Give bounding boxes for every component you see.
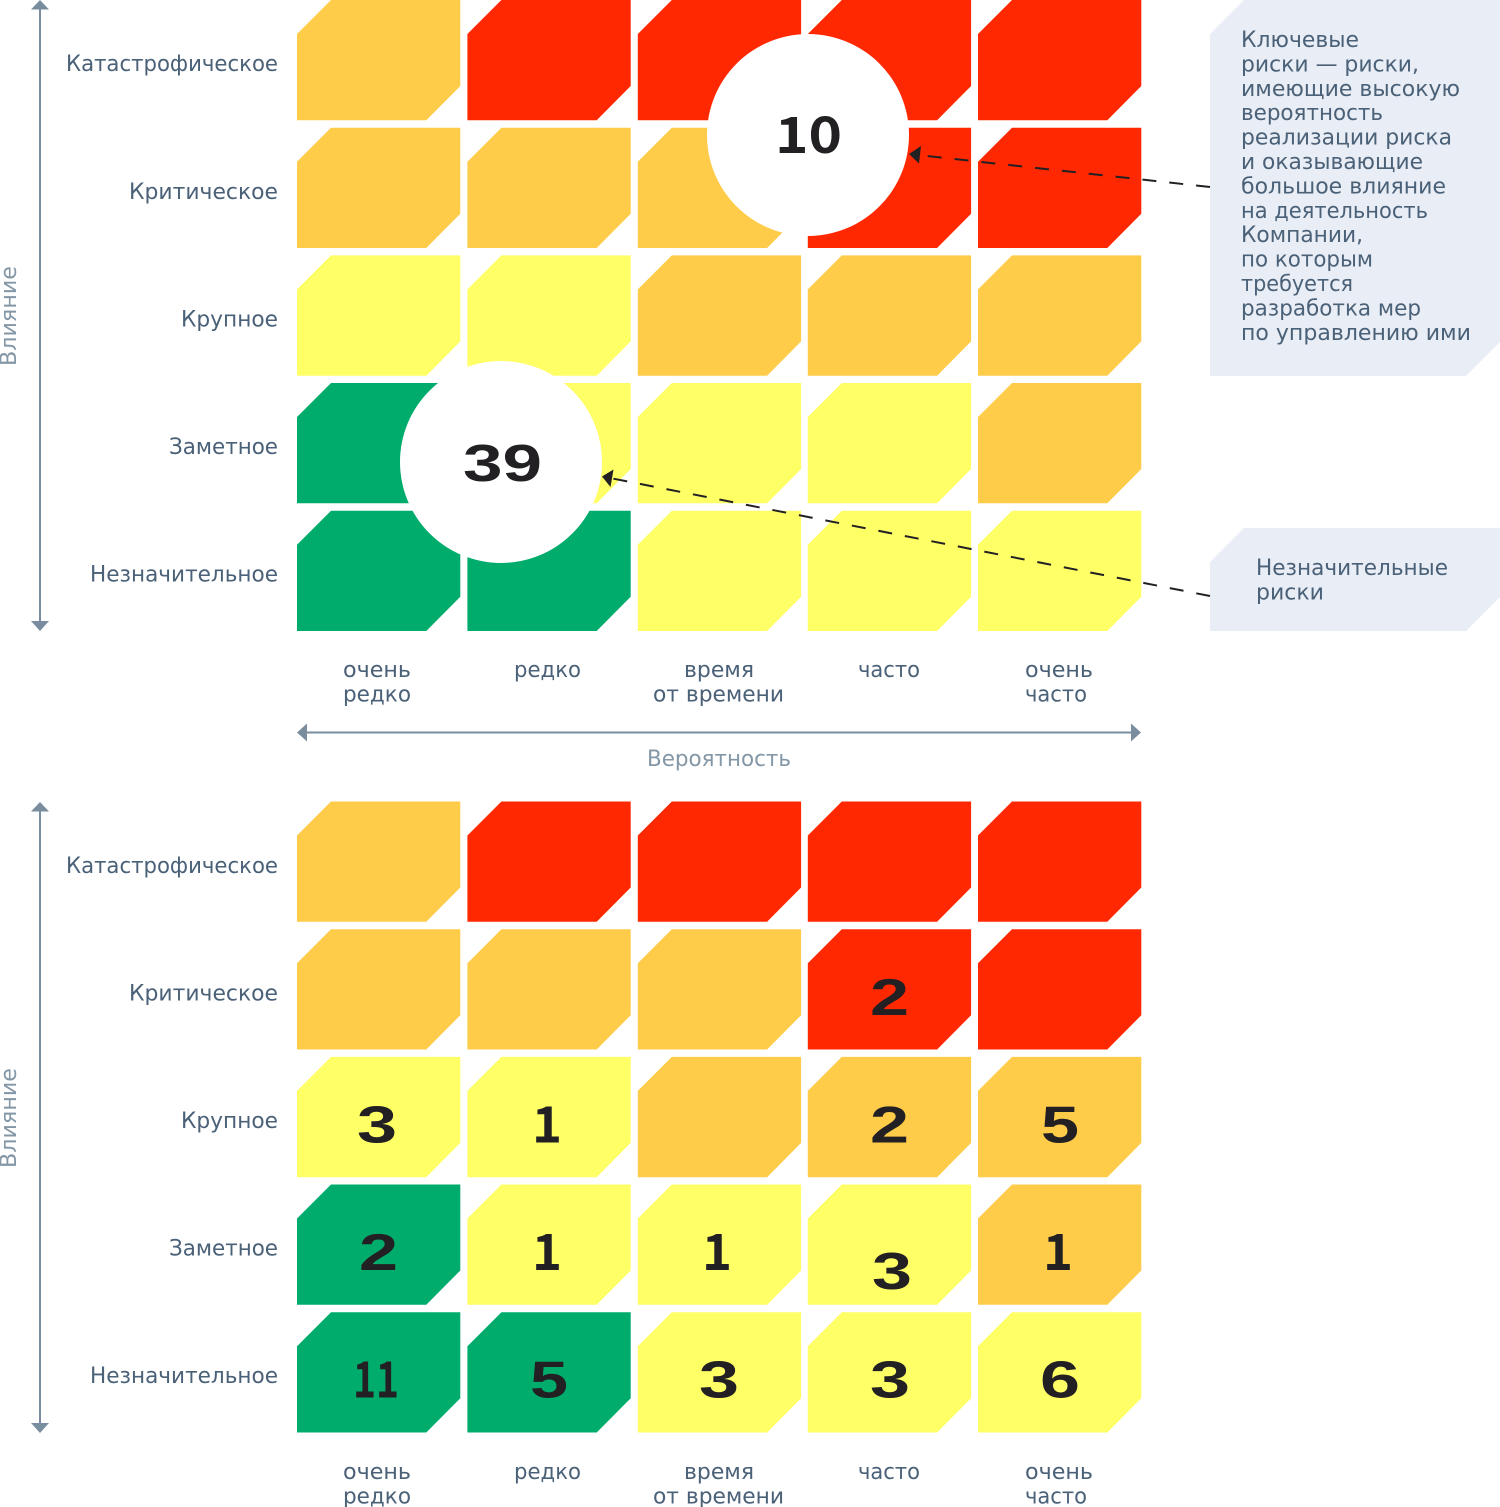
matrix row: critical [297, 929, 1141, 1050]
panel: top risk matrix [297, 0, 1141, 631]
impact labels, bottom matrix: Незначительное [90, 1364, 278, 1389]
probability labels, top matrix: время [684, 658, 754, 683]
risk counts in cells [353, 969, 1080, 1412]
panel: key risks explanation: имеющие высокую [1241, 77, 1460, 102]
panel: key risks explanation: риски — риски, [1241, 52, 1419, 77]
impact labels, bottom matrix: Крупное [181, 1109, 278, 1134]
probability labels, bottom matrix: очень [1025, 1460, 1093, 1485]
panel: insignificant risks explanation: риски [1256, 580, 1324, 606]
risk counts in cells: 5 [1041, 1096, 1079, 1154]
arrow: key risks callout to circle 10 [909, 146, 1210, 187]
panel: insignificant risks explanation [1210, 528, 1500, 631]
risk counts in cells: 2 [359, 1224, 398, 1282]
probability labels, top matrix: редко [343, 682, 411, 708]
impact labels, bottom matrix: Критическое [129, 982, 278, 1006]
risk counts in cells: 2 [870, 1096, 909, 1154]
risk counts in cells: 3 [357, 1096, 397, 1154]
risk counts in cells: 1 [532, 1086, 562, 1158]
matrix row: noticeable [297, 383, 1141, 503]
callout: key risks count 10: 10 [775, 96, 842, 168]
impact labels, top matrix: Незначительное [90, 562, 278, 588]
probability labels, bottom matrix [343, 1460, 1093, 1507]
risk counts in cells: 3 [870, 1352, 910, 1410]
impact labels, top matrix: Крупное [181, 308, 278, 332]
probability labels, top matrix: очень [343, 658, 411, 683]
probability labels, bottom matrix: время [684, 1460, 754, 1485]
risk counts in cells: 11 [353, 1340, 399, 1412]
panel: key risks explanation: требуется [1241, 272, 1353, 297]
matrix row: catastrophic [297, 802, 1141, 922]
impact labels, top matrix: Критическое [129, 180, 278, 205]
callout: insignificant risks count 39: 39 [463, 435, 542, 493]
matrix row: major [297, 1057, 1141, 1177]
arrow: insignificant risks callout to circle 39 [602, 470, 1210, 596]
arrow: vertical impact axis, top matrix [31, 0, 49, 631]
risk counts in cells: 3 [872, 1243, 912, 1301]
matrix row: major [297, 255, 1141, 376]
risk counts in cells: 1 [532, 1213, 562, 1285]
panel: key risks explanation: разработка мер [1241, 296, 1421, 321]
panel: key risks explanation: по управлению ими [1241, 321, 1471, 346]
impact labels, top matrix [66, 52, 278, 588]
risk counts in cells: 1 [702, 1213, 732, 1285]
arrow: vertical impact axis, bottom matrix [31, 802, 49, 1433]
axis title: probability: Вероятность [647, 747, 791, 772]
arrow: horizontal probability axis [297, 724, 1141, 742]
panel: key risks explanation: Компании, [1241, 223, 1363, 248]
impact labels, bottom matrix: Катастрофическое [66, 854, 278, 879]
panel: key risks explanation: и оказывающие [1241, 150, 1423, 175]
panel: key risks explanation: Ключевые [1241, 28, 1359, 53]
panel: key risks explanation: по которым [1241, 248, 1373, 273]
probability labels, top matrix [343, 658, 1093, 708]
probability labels, top matrix: часто [858, 658, 920, 683]
panel: key risks explanation: реализации риска [1241, 126, 1452, 151]
impact labels, bottom matrix: Заметное [169, 1236, 278, 1262]
risk counts in cells: 2 [870, 969, 909, 1027]
impact labels, top matrix: Катастрофическое [66, 52, 278, 77]
panel: key risks explanation [1210, 0, 1500, 376]
impact labels, top matrix: Заметное [169, 435, 278, 460]
risk counts in cells: 6 [1040, 1352, 1080, 1410]
panel: key risks explanation: на деятельность [1241, 199, 1428, 224]
impact labels, bottom matrix [66, 854, 278, 1389]
callout: key risks count 10 [707, 34, 909, 236]
probability labels, bottom matrix: очень [343, 1460, 411, 1485]
probability labels, bottom matrix: редко [514, 1460, 581, 1485]
probability labels, top matrix: редко [514, 658, 581, 683]
panel: key risks explanation: вероятность [1241, 101, 1383, 126]
matrix row: insignificant [297, 511, 1141, 631]
matrix row: critical [297, 128, 1141, 248]
risk counts in cells: 5 [530, 1352, 568, 1410]
panel: insignificant risks explanation: Незначительные [1256, 556, 1448, 581]
panel: bottom risk matrix with counts [297, 802, 1141, 1432]
risk counts in cells: 3 [699, 1352, 739, 1410]
callout: insignificant risks count 39 [400, 361, 602, 563]
matrix row: noticeable [297, 1184, 1141, 1305]
matrix row: insignificant [297, 1312, 1141, 1432]
probability labels, top matrix: от времени [653, 682, 784, 708]
probability labels, top matrix: часто [1025, 682, 1087, 708]
matrix row: catastrophic [297, 0, 1141, 120]
risk counts in cells: 1 [1043, 1213, 1073, 1285]
probability labels, bottom matrix: часто [858, 1460, 920, 1485]
panel: key risks explanation: большое влияние [1241, 174, 1446, 199]
probability labels, top matrix: очень [1025, 658, 1093, 683]
